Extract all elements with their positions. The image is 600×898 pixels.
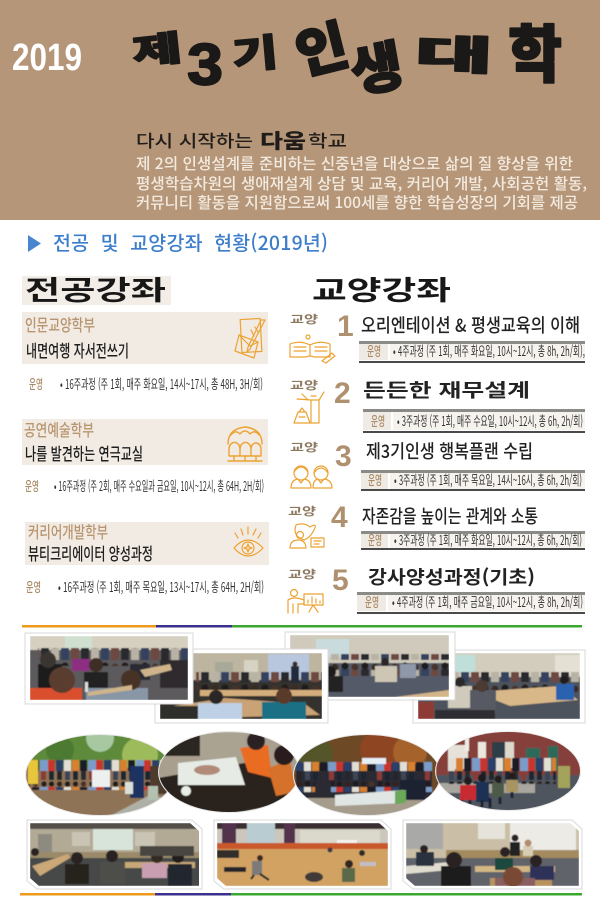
icon: theatre seats — [228, 427, 262, 461]
panel: major courses — [22, 269, 269, 596]
schedule row 2 — [363, 409, 585, 433]
description: 평생학습차원의 생애재설계 상담 및 교육, 커리어 개발, 사회공헌 활동, — [136, 172, 587, 194]
year 2019: 2019 — [12, 37, 82, 79]
top colour rule — [22, 625, 582, 628]
panel: liberal arts courses — [288, 269, 585, 614]
course 2: 든든한 재무설계 — [363, 377, 530, 403]
operation line 3: • 16주과정 (주 1회, 매주 목요일, 13시~17시, 총 64H, 2H/회) — [58, 576, 264, 596]
photo: tea table — [158, 731, 300, 814]
schedule row 5: 운영 — [365, 592, 379, 611]
icon: heart thought and note — [290, 524, 324, 548]
course card 2 — [22, 417, 268, 465]
icon: presenter at chart — [288, 590, 323, 613]
course card 2: 공연예술학부 — [24, 417, 94, 441]
title: 제3기 인생대학 — [129, 1, 562, 108]
description: 제 2의 인생설계를 준비하는 신중년을 대상으로 삶의 질 향상을 위한 — [136, 152, 573, 174]
course 5 — [288, 564, 585, 614]
photo: classroom 3 — [285, 632, 455, 700]
header banner — [0, 0, 600, 220]
course 1: 1 — [337, 310, 354, 343]
course 2: 2 — [334, 377, 351, 410]
operation line 3 — [26, 576, 264, 596]
subtitle: 다움 — [260, 125, 306, 154]
schedule row 4: 운영 — [368, 530, 382, 549]
photo: autumn group — [293, 730, 441, 816]
course 1 — [290, 310, 585, 363]
course 5: 5 — [332, 564, 349, 597]
operation line 3: 운영 — [26, 577, 41, 596]
title: 제3기 인생대학: 제 — [129, 20, 184, 76]
photo: classroom 1 — [25, 633, 193, 704]
course card 1 — [22, 312, 268, 364]
section heading: 전공 및 교양강좌 현황(2019년) — [53, 227, 328, 256]
icon: open book — [290, 335, 335, 363]
course card 1: 내면여행 자서전쓰기 — [26, 337, 129, 362]
course 2 — [290, 377, 585, 433]
course 3: 교양 — [290, 439, 318, 455]
title: 제3기 인생대학: 3 — [187, 32, 223, 97]
course 3: 3 — [335, 440, 352, 473]
photo: lecture room — [403, 820, 582, 889]
icon: two people — [291, 466, 332, 488]
course 5: 교양 — [288, 566, 316, 582]
photo: classroom 4 — [413, 650, 585, 723]
photo: gym floor — [214, 820, 391, 889]
schedule row 1 — [359, 340, 585, 363]
title: 제3기 인생대학: 학 — [508, 5, 562, 95]
course card 3: 뷰티크리에이터 양성과정 — [28, 540, 153, 565]
schedule row 1: 운영 — [367, 341, 381, 360]
title: 제3기 인생대학: 기 — [229, 21, 280, 80]
photo: classroom 2 — [155, 649, 328, 723]
course card 1: 인문교양학부 — [25, 312, 95, 336]
title: 제3기 인생대학: 생 — [344, 21, 408, 108]
course 4 — [288, 501, 585, 550]
subtitle: 학교 — [308, 127, 347, 152]
course card 3 — [25, 519, 269, 565]
course 3 — [290, 438, 585, 491]
icon: eye with sparkle — [234, 527, 263, 556]
course card 2: 나를 발견하는 연극교실 — [25, 440, 143, 465]
schedule row 3: 운영 — [368, 470, 382, 489]
course 4: 교양 — [288, 503, 316, 519]
course 4: 4 — [331, 501, 348, 534]
heading: 교양강좌: 교양강좌 — [312, 269, 451, 308]
heading: 전공강좌: 전공강좌 — [25, 269, 166, 308]
bottom colour rule — [20, 893, 582, 896]
subtitle — [136, 125, 347, 154]
photo: palace group — [435, 731, 582, 811]
schedule row 5 — [357, 591, 585, 614]
course 5: 강사양성과정(기초) — [368, 564, 535, 590]
course 4: 자존감을 높이는 관계와 소통 — [362, 503, 538, 529]
operation line 2 — [25, 475, 264, 495]
icon: raised arms and money bag — [294, 392, 324, 423]
icon: pen and paper — [235, 318, 265, 358]
operation line 2: • 16주과정 (주 2회, 매주 수요일과 금요일, 10시~12시, 총 64H, 2H/회) — [54, 475, 264, 495]
subtitle: 다시 시작하는 — [136, 127, 253, 152]
course 3: 제3기인생 행복플랜 수립 — [366, 438, 533, 464]
photo: group in forest — [25, 734, 168, 816]
title: 제3기 인생대학: 대 — [414, 21, 494, 82]
operation line 2: 운영 — [25, 476, 39, 495]
course card 3: 커리어개발학부 — [28, 519, 108, 543]
operation line 1: • 16주과정 (주 1회, 매주 화요일, 14시~17시, 총 48H, 3H/회) — [60, 373, 263, 393]
course 1: 교양 — [290, 311, 318, 327]
description — [136, 152, 587, 213]
operation line 1 — [29, 373, 263, 393]
schedule row 2: 운영 — [371, 411, 385, 430]
operation line 1: 운영 — [29, 374, 43, 393]
title: 제3기 인생대학: 인 — [286, 1, 355, 90]
description: 커뮤니티 활동을 지원함으로써 100세를 향한 학습성장의 기회를 제공 — [136, 191, 578, 213]
course 2: 교양 — [290, 377, 318, 393]
heading: 전공강좌 — [22, 269, 171, 308]
photo: seminar room — [27, 820, 202, 889]
